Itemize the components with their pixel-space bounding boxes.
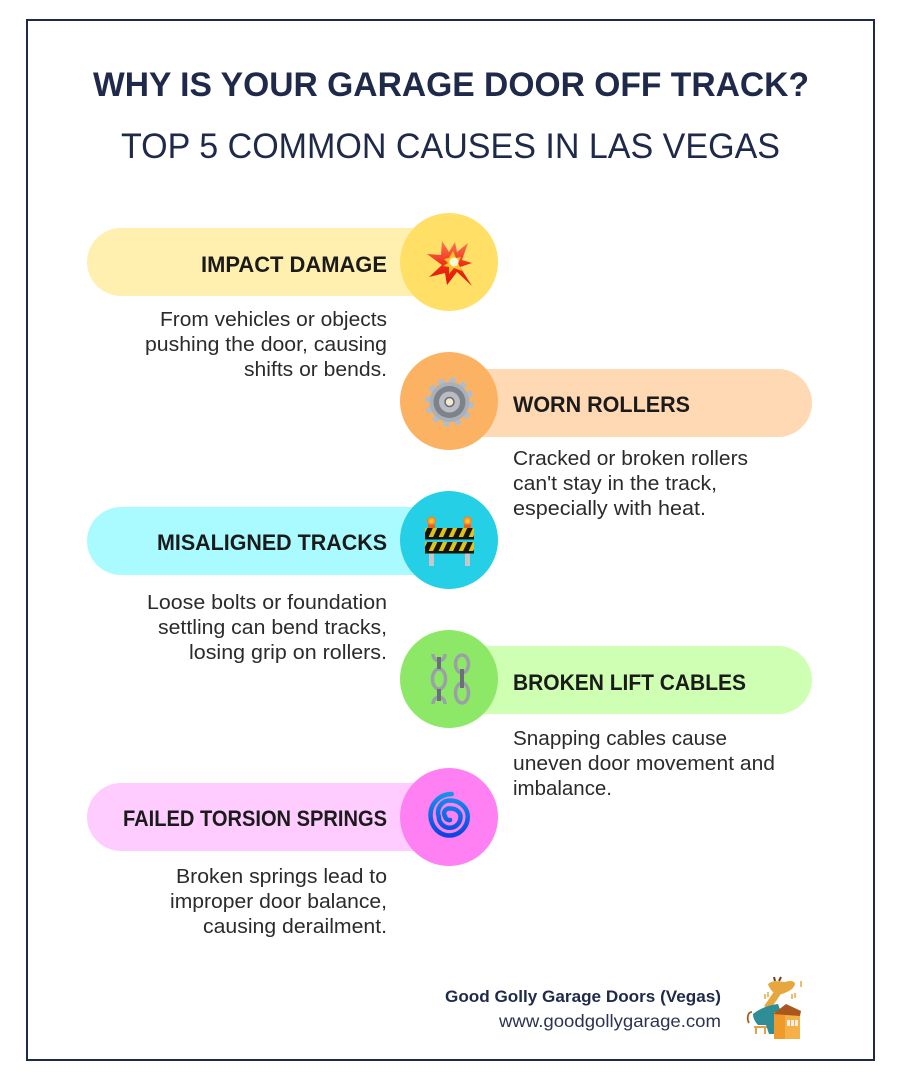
footer: company name: Good Golly Garage Doors (Vegas) <box>445 987 721 1006</box>
panel: failed torsion springs <box>87 768 498 938</box>
tail and bench <box>748 1012 752 1023</box>
subtitle: TOP 5 COMMON CAUSES IN LAS VEGAS <box>121 127 780 166</box>
text: broken lift cables description: Snapping cables cause <box>513 728 727 750</box>
neck <box>767 992 778 1008</box>
icon: gear <box>400 352 498 450</box>
text: failed torsion springs description: improper door balance, <box>170 891 387 913</box>
panel: worn rollers <box>400 352 812 520</box>
text: impact damage description: From vehicles or objects <box>160 309 387 331</box>
icon: construction barrier <box>400 491 498 589</box>
panel: broken lift cables <box>400 630 812 800</box>
heading: worn rollers: WORN ROLLERS <box>513 392 690 417</box>
garage front <box>785 1014 800 1039</box>
pill: worn rollers <box>449 369 812 437</box>
heading: failed torsion springs: FAILED TORSION SPRINGS <box>123 806 387 831</box>
icon: chains <box>400 630 498 728</box>
text: failed torsion springs description <box>170 866 387 938</box>
panel: impact damage <box>87 213 498 381</box>
text: impact damage description: pushing the door, causing <box>145 334 387 356</box>
text: worn rollers description <box>513 448 748 520</box>
text: broken lift cables description: uneven door movement and <box>513 753 775 775</box>
text: impact damage description: shifts or bends. <box>244 359 387 381</box>
icon: collision burst <box>400 213 498 311</box>
heading: broken lift cables: BROKEN LIFT CABLES <box>513 670 746 695</box>
heading: impact damage: IMPACT DAMAGE <box>201 252 387 277</box>
roof <box>773 1004 801 1016</box>
text: worn rollers description: can't stay in the track, <box>513 473 717 495</box>
panel: misaligned tracks <box>87 491 498 664</box>
text: impact damage description <box>145 309 387 381</box>
text: misaligned tracks description: settling can bend tracks, <box>158 617 387 639</box>
heading: misaligned tracks: MISALIGNED TRACKS <box>157 530 387 555</box>
text: failed torsion springs description: Broken springs lead to <box>176 866 387 888</box>
pill: broken lift cables <box>449 646 812 714</box>
pill: failed torsion springs <box>87 783 449 851</box>
text: worn rollers description: especially with heat. <box>513 498 706 520</box>
text: failed torsion springs description: causing derailment. <box>203 916 387 938</box>
footer: website: www.goodgollygarage.com <box>498 1011 721 1031</box>
icon: spiral <box>400 768 498 866</box>
windows <box>787 1020 790 1026</box>
pill: misaligned tracks <box>87 507 449 575</box>
title: WHY IS YOUR GARAGE DOOR OFF TRACK? <box>93 66 809 104</box>
garage side <box>774 1012 785 1039</box>
head <box>768 981 795 994</box>
text: misaligned tracks description: losing grip on rollers. <box>189 642 387 664</box>
icon: giraffe with garage logo <box>748 977 801 1039</box>
text: broken lift cables description: imbalance. <box>513 778 612 800</box>
text: broken lift cables description <box>513 728 775 800</box>
music notes <box>765 981 801 999</box>
text: misaligned tracks description: Loose bolts or foundation <box>147 592 387 614</box>
text: misaligned tracks description <box>147 592 387 664</box>
pill: impact damage <box>87 228 449 296</box>
body <box>753 1004 781 1034</box>
text: worn rollers description: Cracked or broken rollers <box>513 448 748 470</box>
